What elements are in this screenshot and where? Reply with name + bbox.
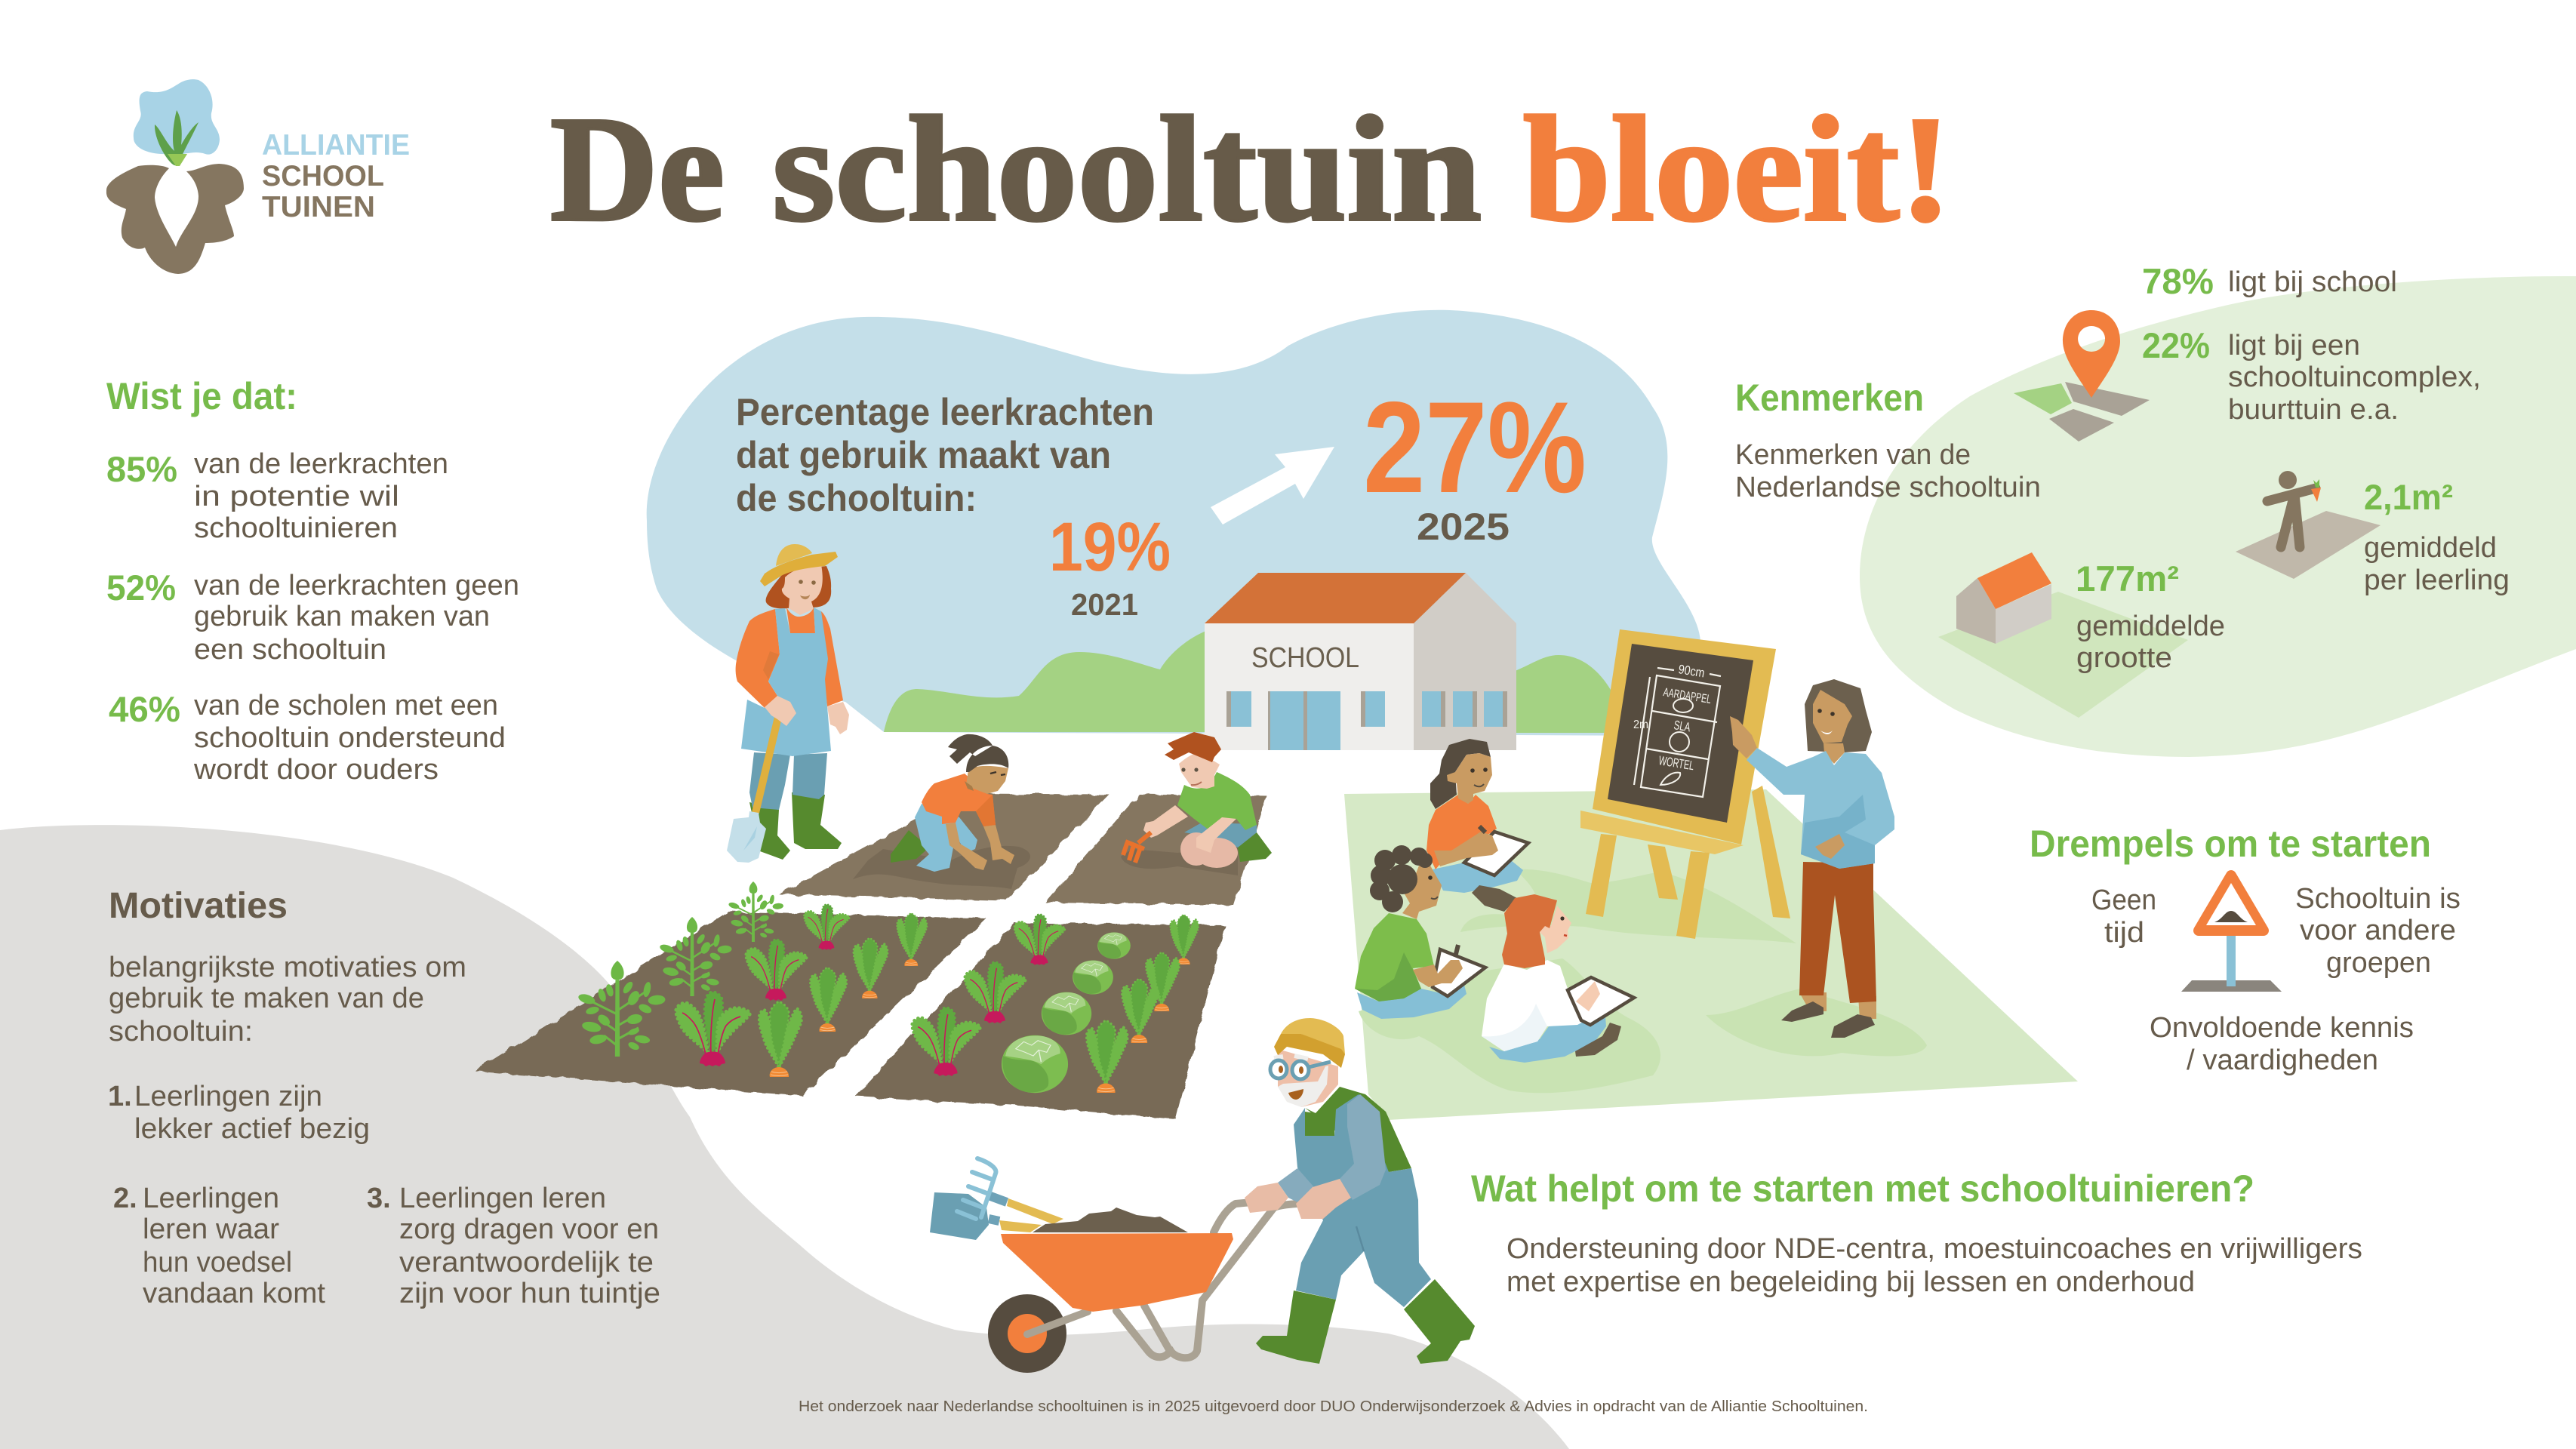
- background: blue blob: [647, 310, 1700, 736]
- barrier: no time: tijd: [2104, 917, 2144, 949]
- stat 177 m2: [2076, 558, 2225, 674]
- figure: sitting child orange shirt: [1426, 739, 1528, 912]
- barrier: knowledge: Onvoldoende kennis: [2150, 1012, 2414, 1044]
- figure: child with rake: [1123, 732, 1272, 868]
- stat 177 m2: gemiddelde: [2076, 611, 2225, 642]
- logo wordmark: ALLIANTIE: [262, 129, 410, 162]
- kenmerken heading: Kenmerken: [1735, 377, 1924, 419]
- stat 85%: van de leerkrachten: [194, 448, 448, 480]
- garden bed: upper left: [779, 794, 1109, 900]
- icon: person with carrot: [2236, 471, 2381, 579]
- stat 85%: schooltuinieren: [194, 512, 398, 544]
- wat helpt text: [1507, 1233, 2362, 1298]
- figure: teacher: [1730, 679, 1894, 1038]
- lawn: [1344, 789, 2078, 1120]
- percentage heading: dat gebruik maakt van: [736, 434, 1111, 476]
- icon: house on lawn: [1938, 552, 2188, 718]
- stat 46%: van de scholen met een: [194, 690, 498, 721]
- barrier: other groups: Schooltuin is: [2295, 883, 2461, 915]
- motivation 3: [367, 1183, 660, 1309]
- drempels heading: Drempels om te starten: [2030, 823, 2431, 865]
- figure: sitting child green shirt: [1355, 845, 1485, 1019]
- stat 22%: 22%: [2142, 325, 2210, 365]
- barrier: no time: Geen: [2091, 884, 2156, 916]
- motivation 3: zorg dragen voor en: [399, 1214, 659, 1245]
- figure: woman with shovel: [727, 544, 849, 863]
- garden bed: upper right: [1045, 794, 1267, 905]
- logo wordmark: SCHOOL: [262, 160, 384, 192]
- stat 2,1 m2: per leerling: [2364, 565, 2510, 596]
- stat 52%: [106, 568, 519, 666]
- icon: map pin: [2014, 310, 2150, 441]
- heading: motivaties: Motivaties: [109, 886, 288, 926]
- stat 85%: in potentie wil: [194, 481, 399, 512]
- stat 46%: [109, 689, 506, 786]
- stat 19% 2021: 19%: [1049, 509, 1171, 586]
- wat helpt heading: Wat helpt om te starten met schooltuinieren?: [1471, 1168, 2254, 1210]
- figure: old man pushing wheelbarrow: [1245, 1018, 1475, 1364]
- stat 46%: wordt door ouders: [193, 754, 439, 786]
- stat 22%: ligt bij een: [2228, 330, 2360, 361]
- barrier: other groups: groepen: [2326, 947, 2431, 979]
- garden bed: lower right: [855, 923, 1225, 1119]
- stat 52%: van de leerkrachten geen: [194, 570, 519, 601]
- stat 52%: 52%: [106, 568, 176, 608]
- motivation 3: zijn voor hun tuintje: [399, 1278, 660, 1309]
- barrier: knowledge: [2150, 1012, 2414, 1076]
- motivation 1: [108, 1081, 370, 1145]
- stat 22%: schooltuincomplex,: [2228, 361, 2481, 393]
- vegetables: [577, 881, 1199, 1093]
- garden bed: lower left: [475, 912, 986, 1096]
- board plan: 2m: [1633, 718, 1648, 731]
- icon: road sign: [2181, 875, 2282, 992]
- stat 22%: [2142, 325, 2481, 426]
- panel: wat helpt: [1471, 1168, 2362, 1298]
- stat 78%: [2142, 261, 2397, 301]
- wheel: [988, 1294, 1066, 1373]
- motivation 3: verantwoordelijk te: [399, 1247, 654, 1278]
- motivation 2: 2.: [113, 1183, 137, 1214]
- barrier: knowledge: / vaardigheden: [2187, 1044, 2378, 1076]
- stat 46%: 46%: [109, 689, 180, 729]
- stat 19% 2021: 2021: [1071, 587, 1138, 622]
- panel: percentage leerkrachten: [736, 375, 1587, 622]
- motivation 2: leren waar: [143, 1214, 279, 1245]
- stat 177 m2: 177m²: [2076, 558, 2179, 598]
- board plan: 90cm: [1677, 662, 1706, 680]
- board plan: SLA: [1673, 718, 1692, 734]
- barrier: other groups: [2295, 883, 2461, 979]
- stat 27% 2025: 27%: [1363, 375, 1587, 520]
- stat 46%: schooltuin ondersteund: [194, 722, 506, 754]
- hills behind school: [884, 630, 1623, 733]
- panel: wist je dat: [106, 375, 519, 786]
- stat 52%: gebruik kan maken van: [194, 601, 490, 632]
- stat 78%: ligt bij school: [2228, 266, 2397, 298]
- stat 2,1 m2: 2,1m²: [2364, 477, 2453, 517]
- icon: logo: [106, 79, 410, 274]
- stat 2,1 m2: [2364, 477, 2510, 596]
- blackboard on easel: [1580, 629, 1790, 939]
- figure: kneeling child: [891, 734, 1014, 872]
- wheelbarrow: [930, 1158, 1297, 1373]
- footer note: Het onderzoek naar Nederlandse schooltuinen is in 2025 uitgevoerd door DUO Onderwijsonderzoek & Advies in opdracht van de Alliantie Schooltuinen.: [799, 1398, 1868, 1415]
- stat 78%: 78%: [2142, 261, 2214, 301]
- motivation 1: Leerlingen zijn: [134, 1081, 322, 1112]
- stat 85%: 85%: [106, 449, 177, 489]
- kenmerken text: [1735, 439, 2041, 503]
- motivation 3: Leerlingen leren: [399, 1183, 606, 1214]
- motivation 2: hun voedsel: [143, 1247, 292, 1278]
- board plan: AARDAPPEL: [1662, 686, 1712, 706]
- motivation 2: [113, 1183, 325, 1309]
- panel: kenmerken: [1735, 261, 2510, 718]
- motivation 3: 3.: [367, 1183, 391, 1214]
- percentage heading: [736, 391, 1154, 519]
- stat 85%: [106, 448, 448, 544]
- motivaties intro: [109, 952, 466, 1048]
- motivation 1: 1.: [108, 1081, 132, 1112]
- motivaties intro: schooltuin:: [109, 1016, 253, 1048]
- figure: sitting child white shirt: [1482, 894, 1634, 1063]
- stat 22%: buurttuin e.a.: [2228, 394, 2399, 426]
- logo wordmark: [262, 129, 410, 223]
- barrier: other groups: voor andere: [2300, 915, 2456, 946]
- title: bloeit!: [1523, 86, 1952, 253]
- stat 2,1 m2: gemiddeld: [2364, 532, 2497, 564]
- stat 19% 2021: [1049, 509, 1171, 622]
- kenmerken text: Nederlandse schooltuin: [1735, 472, 2041, 503]
- motivation 2: Leerlingen: [143, 1183, 279, 1214]
- motivaties intro: gebruik te maken van de: [109, 983, 424, 1014]
- panel: motivaties: [108, 886, 660, 1309]
- school name: SCHOOL: [1251, 642, 1359, 674]
- panel: drempels: [2030, 823, 2461, 1076]
- background: grey blob: [0, 825, 1569, 1449]
- stat 177 m2: grootte: [2076, 642, 2172, 674]
- background: green blob: [1860, 276, 2576, 757]
- motivation 1: lekker actief bezig: [134, 1113, 370, 1145]
- percentage heading: de schooltuin:: [736, 477, 977, 519]
- stat 52%: een schooltuin: [194, 634, 386, 666]
- motivaties intro: belangrijkste motivaties om: [109, 952, 466, 983]
- title: schooltuin: [772, 86, 1482, 253]
- heading: wist je dat: Wist je dat:: [106, 375, 297, 417]
- kenmerken text: Kenmerken van de: [1735, 439, 1971, 471]
- wat helpt text: met expertise en begeleiding bij lessen en onderhoud: [1507, 1266, 2195, 1298]
- stat 27% 2025: 2025: [1417, 506, 1510, 548]
- percentage heading: Percentage leerkrachten: [736, 391, 1154, 433]
- board plan: [1633, 662, 1721, 797]
- board plan: WORTEL: [1657, 753, 1695, 773]
- motivation 2: vandaan komt: [143, 1278, 325, 1309]
- title: De: [550, 86, 725, 253]
- school building: [1205, 573, 1516, 750]
- arrow up: [1211, 447, 1334, 525]
- wat helpt text: Ondersteuning door NDE-centra, moestuincoaches en vrijwilligers: [1507, 1233, 2362, 1265]
- barrier: no time: [2091, 884, 2156, 949]
- logo wordmark: TUINEN: [262, 191, 375, 223]
